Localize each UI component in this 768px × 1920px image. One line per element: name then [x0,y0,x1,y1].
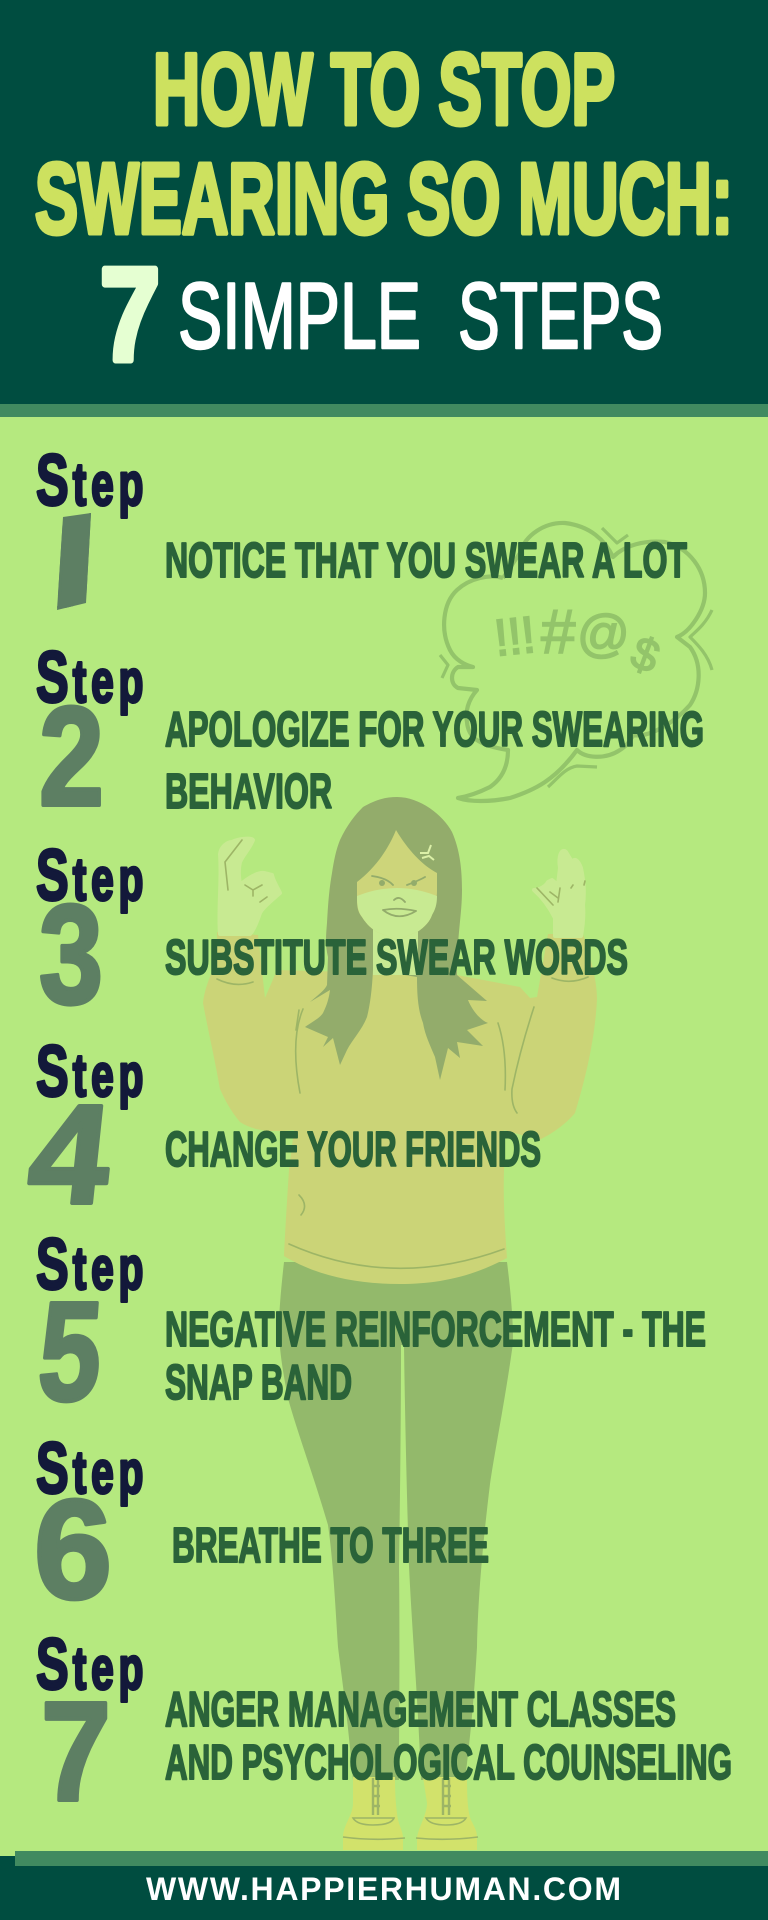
step 5 label: Step [36,1225,148,1305]
step 2 text [165,703,704,819]
big number seven: 7 [100,241,160,388]
step 5 text [165,1303,706,1410]
swear symbols: @ [577,605,630,663]
step 6 text: BREATHE TO THREE [172,1519,489,1573]
step 2 text: BEHAVIOR [165,765,332,819]
step 1 [36,452,688,610]
swear symbols: # [541,598,576,667]
right hand [534,851,585,936]
hair [305,797,488,1080]
step 6 [34,1429,489,1628]
swear symbols [491,598,666,683]
neck [373,925,418,975]
swear symbols: $ [625,626,666,683]
step 2 number: 2 [39,677,104,835]
website url: WWW.HAPPIERHUMAN.COM [146,1871,621,1907]
face [357,830,437,940]
step 7 [36,1625,732,1830]
boots [343,1777,478,1850]
clothing folds [217,977,588,1268]
panel: header [0,0,768,417]
step 3 label: Step [36,836,148,916]
step 7 text [165,1683,732,1790]
step 3 number: 3 [39,875,103,1033]
step 6 label: Step [36,1429,148,1509]
step 7 number: 7 [41,1672,111,1830]
anger mark [420,845,434,860]
swear symbols: !!! [491,606,537,668]
step 3 [36,836,628,1033]
step 4 number: 4 [22,1075,118,1233]
step 4 label: Step [36,1032,148,1112]
subtitle: SIMPLE [178,263,421,368]
subtitle: STEPS [458,263,663,368]
step 1 number: 1 [4,480,135,638]
step 1 label: Step [36,441,148,521]
step 5 number: 5 [34,1272,107,1430]
step 4 [22,1032,541,1233]
step 6 number: 6 [34,1470,112,1628]
pants [279,1262,513,1780]
step 5 text: SNAP BAND [165,1356,352,1410]
step 5 [34,1225,706,1430]
step 2 label: Step [36,638,148,718]
figure: angry woman [203,797,597,1850]
panel: footer [0,1851,768,1920]
step 7 label: Step [36,1625,148,1705]
sweater [203,932,597,1284]
speech bubble [440,523,712,801]
left hand [219,839,280,934]
step 2 [36,638,704,835]
step 4 text: CHANGE YOUR FRIENDS [165,1123,541,1177]
